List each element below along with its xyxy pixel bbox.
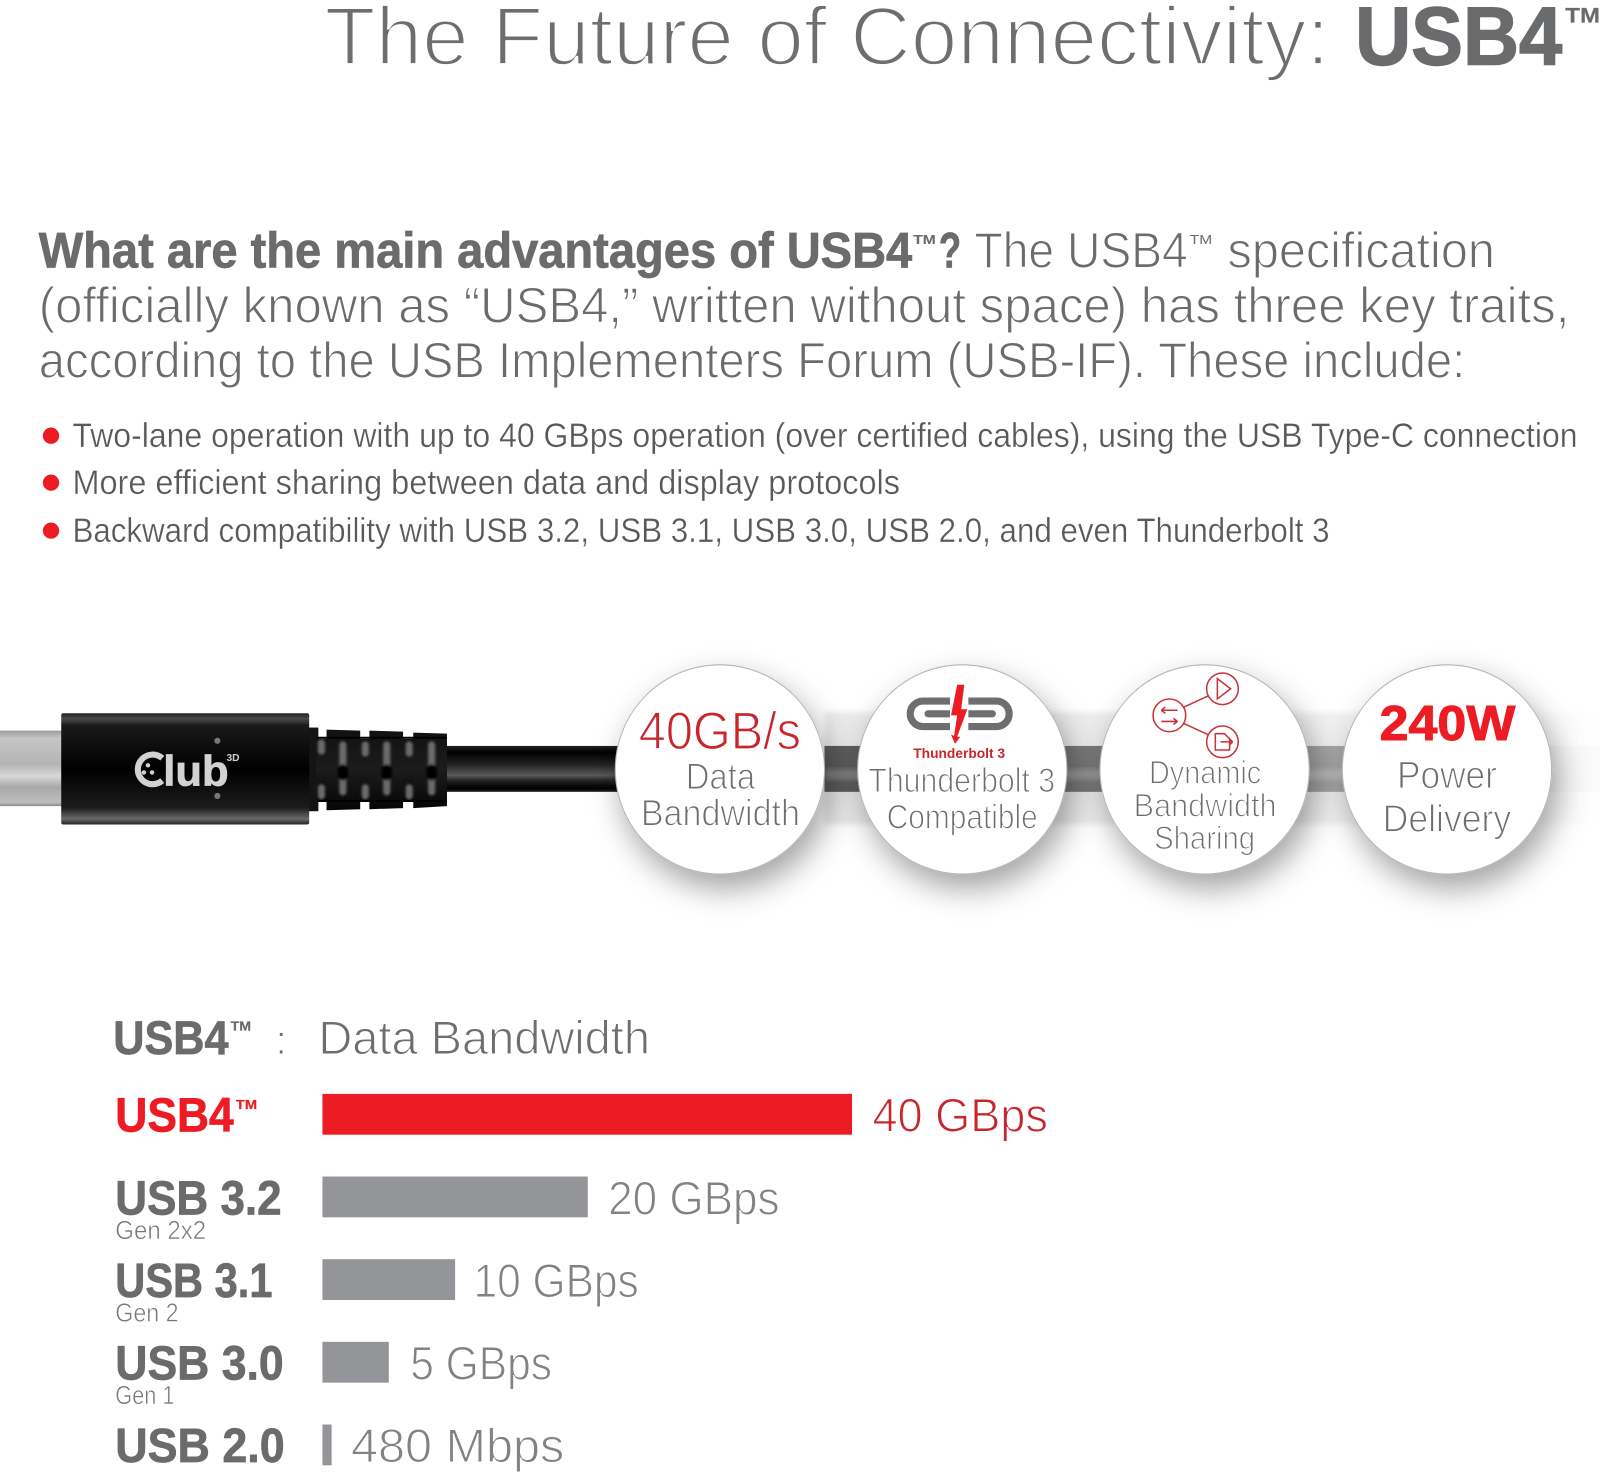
intro paragraph: (officially known as “USB4,” written without space) has three key traits, [39, 277, 1569, 333]
strain relief [308, 728, 447, 811]
club3d logo: 3D [227, 753, 240, 764]
bullet list [43, 417, 1578, 550]
club3d logo [138, 738, 240, 799]
row: USB4 40 GBps: 40 GBps [872, 1090, 1048, 1142]
icon: share network [1153, 673, 1238, 758]
row: USB 2.0 480 Mbps [115, 1420, 564, 1473]
icon: USB-C port with lightning bolt [910, 685, 1009, 744]
badge: 240W power delivery [1342, 665, 1552, 874]
badge: dynamic bandwidth sharing: Dynamic [1149, 754, 1261, 791]
badge: 240W power delivery: Power [1397, 754, 1497, 796]
chart heading: USB4 [113, 1012, 229, 1064]
row: USB 3.0 5 GBps: 5 GBps [410, 1338, 552, 1390]
club3d logo: lub [163, 748, 229, 796]
row: USB4 40 GBps: TM [236, 1097, 257, 1112]
chart heading: TM [231, 1019, 251, 1034]
connector body [61, 713, 309, 824]
badge: Thunderbolt 3 compatible: Compatible [887, 799, 1038, 837]
badge: Thunderbolt 3 compatible: Thunderbolt 3 [868, 762, 1055, 800]
row: USB 3.1 10 GBps: USB 3.1 [115, 1255, 272, 1308]
intro paragraph: The USB4 [974, 222, 1188, 278]
chart heading: : [276, 1017, 287, 1063]
row: USB 3.0 5 GBps: USB 3.0 [115, 1338, 284, 1391]
badge: 40GB/s data bandwidth: 40GB/s [639, 702, 801, 761]
title: TM [1565, 3, 1600, 27]
USB-C cable connector [0, 713, 629, 824]
row: USB4 40 GBps: USB4 [115, 1090, 234, 1143]
row: USB 3.1 10 GBps [115, 1255, 639, 1327]
row: USB 2.0 480 Mbps: USB 2.0 [115, 1420, 285, 1473]
bullet list: Backward compatibility with USB 3.2, USB 3.1, USB 3.0, USB 2.0, and even Thunderbolt 3 [72, 512, 1330, 550]
silver plug [0, 731, 63, 806]
intro paragraph: ? [939, 222, 961, 278]
intro paragraph: TM [1190, 232, 1212, 247]
chart heading: Data Bandwidth [318, 1012, 650, 1064]
faded cable behind the circles [824, 712, 1600, 824]
row: USB 3.1 10 GBps: 10 GBps [473, 1255, 639, 1307]
row: USB 3.0 5 GBps [115, 1338, 552, 1410]
badge: Thunderbolt 3 compatible [858, 665, 1067, 874]
row: USB 3.2 20 GBps [115, 1172, 780, 1245]
badge: Thunderbolt 3 compatible: Thunderbolt 3 [913, 746, 1005, 762]
row: USB 2.0 480 Mbps: 480 Mbps [351, 1420, 564, 1472]
row: USB 3.2 20 GBps: Gen 2x2 [115, 1217, 206, 1245]
row: USB 3.2 20 GBps: 20 GBps [608, 1172, 780, 1224]
badge: 240W power delivery: 240W [1380, 697, 1516, 751]
intro paragraph [39, 222, 1569, 389]
row: USB 3.1 10 GBps: Gen 2 [115, 1299, 179, 1327]
row: USB 3.2 20 GBps: USB 3.2 [115, 1172, 282, 1225]
intro paragraph: What are the main advantages of USB4 [39, 222, 912, 278]
badge: dynamic bandwidth sharing: Sharing [1154, 819, 1255, 856]
bar chart: data bandwidth [113, 1012, 1048, 1473]
chart heading [113, 1012, 650, 1064]
badge: 240W power delivery: Delivery [1383, 798, 1511, 840]
row: USB 3.0 5 GBps: Gen 1 [115, 1382, 174, 1410]
intro paragraph: specification [1228, 222, 1495, 278]
badge: 40GB/s data bandwidth: Data [686, 756, 756, 797]
intro paragraph: TM [913, 232, 936, 247]
bullet list: More efficient sharing between data and display protocols [72, 464, 900, 502]
badge: dynamic bandwidth sharing [1100, 665, 1309, 874]
badge: dynamic bandwidth sharing: Bandwidth [1134, 786, 1277, 823]
badge: 40GB/s data bandwidth [615, 665, 824, 874]
badge: 40GB/s data bandwidth: Bandwidth [641, 793, 800, 834]
row: USB4 40 GBps [115, 1090, 1048, 1143]
intro paragraph: according to the USB Implementers Forum (USB-IF). These include: [39, 333, 1465, 389]
cable [445, 746, 629, 792]
